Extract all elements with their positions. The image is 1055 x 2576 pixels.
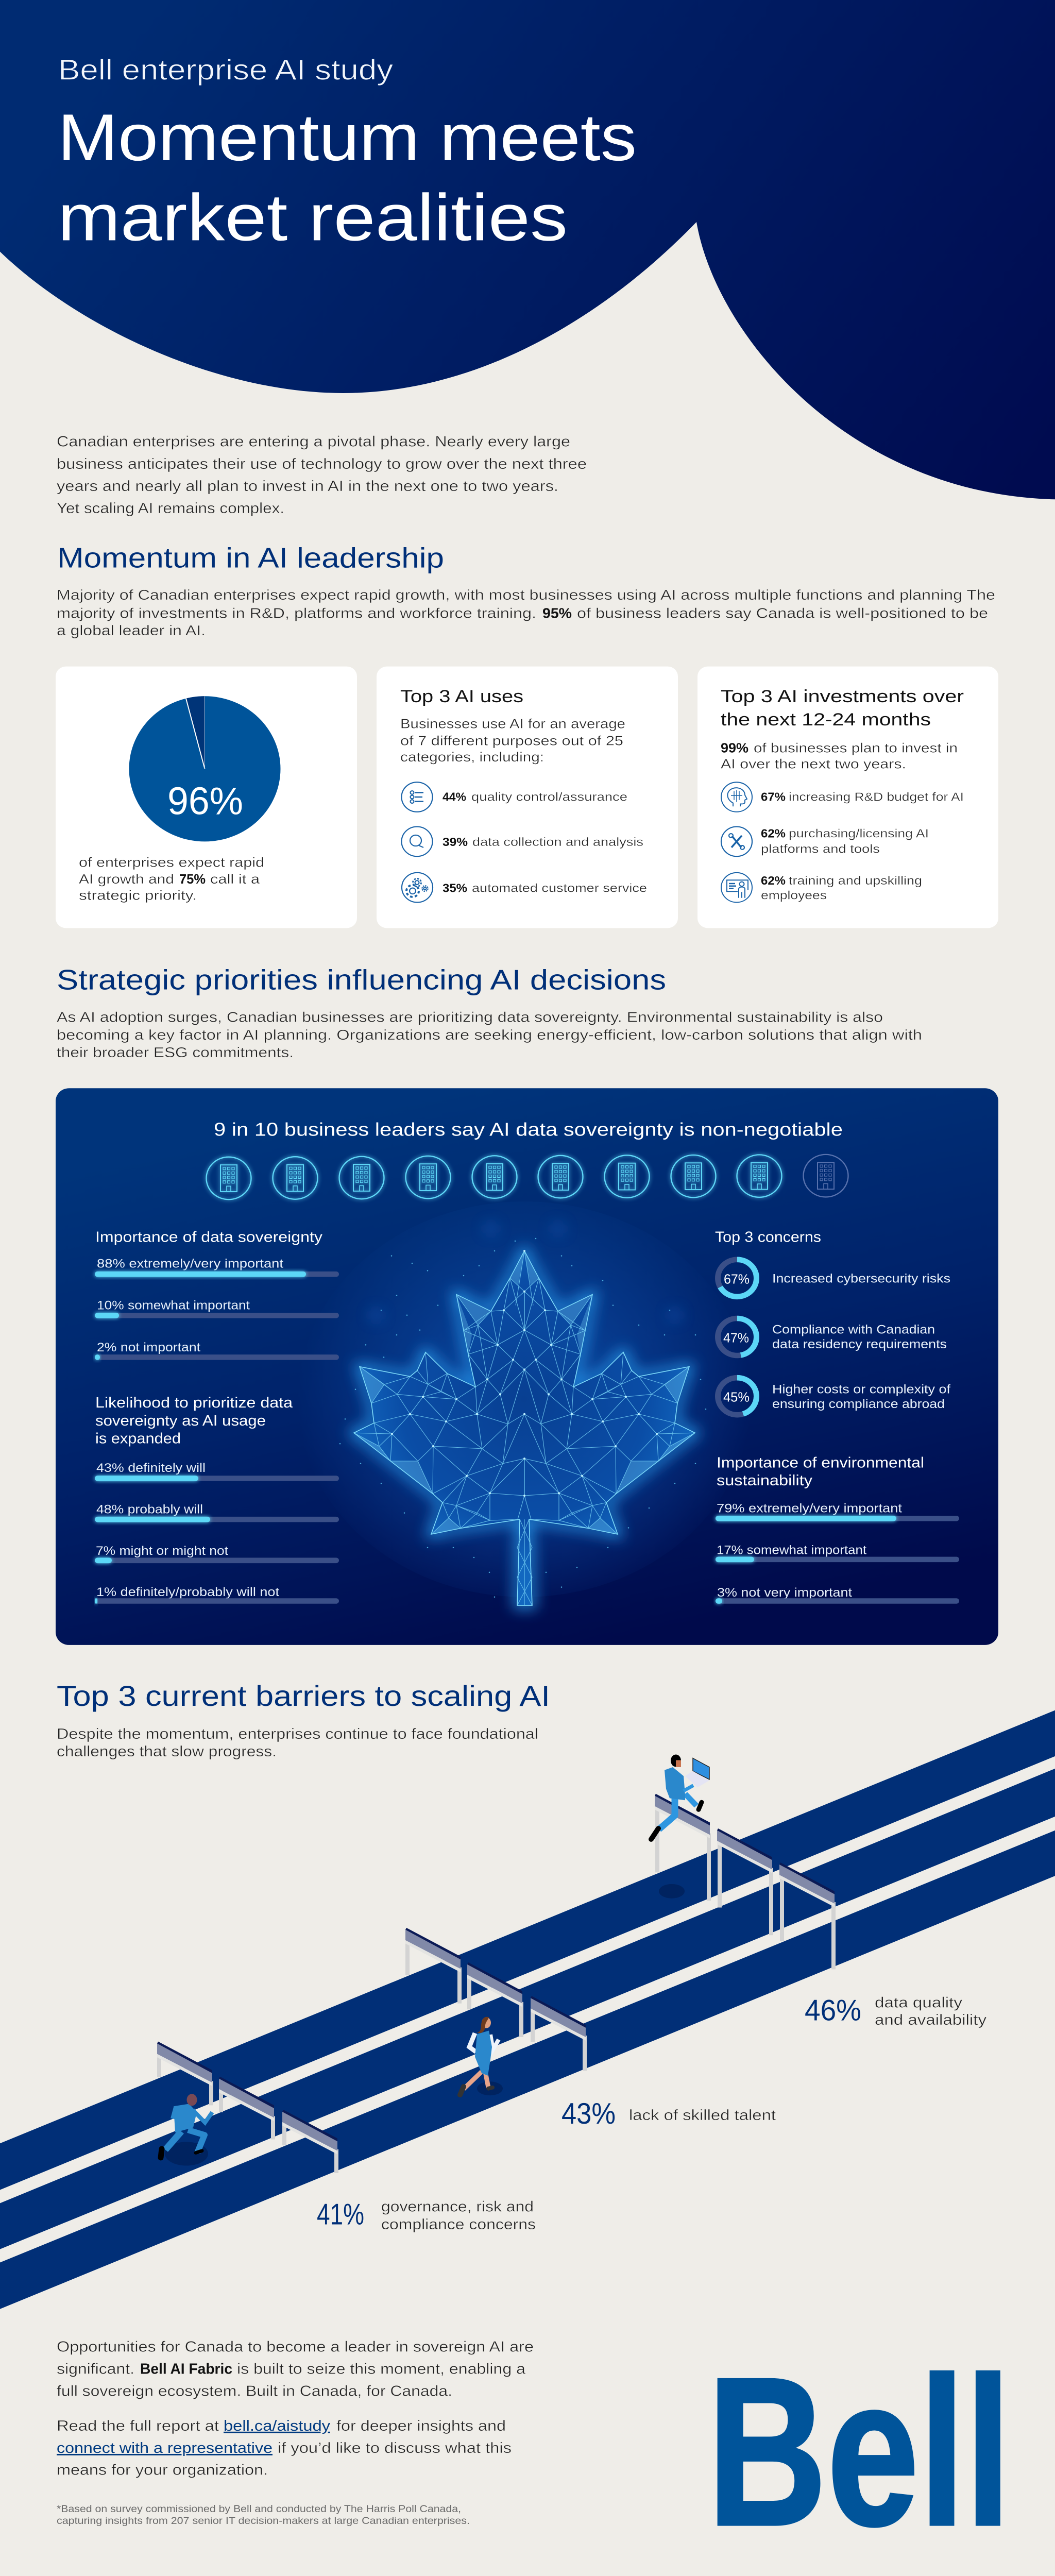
chart: likelihood to prioritize bbox=[95, 1395, 339, 1604]
bar: 17% bbox=[716, 1544, 959, 1562]
glow behind leaf bbox=[326, 1212, 726, 1596]
panel title: 9 in 10 business leaders say AI data sovereignty is non-negotiable bbox=[214, 1118, 843, 1140]
stat: 46% data quality: 46% bbox=[805, 1994, 861, 2027]
leadership paragraph: Majority of Canadian enterprises expect rapid growth, with most businesses using AI across multiple functions and planning The bbox=[57, 587, 995, 603]
item: quality control: 44% bbox=[443, 790, 466, 804]
chart heading: is expanded bbox=[95, 1430, 181, 1447]
call to action paragraph bbox=[57, 2417, 512, 2478]
card heading: the next 12-24 months bbox=[721, 710, 931, 730]
leadership paragraph: of business leaders say Canada is well-positioned to be bbox=[577, 605, 988, 621]
intro paragraph bbox=[57, 433, 587, 517]
illustration: running tracks bbox=[0, 1710, 1055, 2309]
bar: 1% bbox=[95, 1585, 339, 1604]
bar: 17%: 17% somewhat important bbox=[717, 1544, 866, 1557]
hurdles: group B bbox=[405, 1928, 587, 2071]
strategic paragraph: becoming a key factor in AI planning. Organizations are seeking energy-efficient, low-carbon solutions that align with bbox=[57, 1027, 922, 1043]
card description: of businesses plan to invest in bbox=[754, 740, 958, 756]
bar: 7%: 7% might or might not bbox=[96, 1545, 228, 1558]
card heading bbox=[721, 686, 964, 730]
panel: data sovereignty bbox=[56, 1088, 998, 1645]
icon: tools bbox=[721, 827, 752, 856]
donut: 45%: 45% bbox=[723, 1389, 750, 1405]
sparkle particles bbox=[340, 1239, 706, 1597]
closing paragraph: full sovereign ecosystem. Built in Canada, for Canada. bbox=[57, 2383, 452, 2400]
pie caption: strategic priority. bbox=[79, 888, 197, 903]
bar: 3%: 3% not very important bbox=[717, 1586, 852, 1600]
figure: woman runner bbox=[460, 2017, 499, 2095]
bar: 10% bbox=[95, 1299, 339, 1318]
panel: top 3 AI uses bbox=[377, 667, 678, 928]
item: data collection: 39% bbox=[443, 835, 468, 849]
barriers paragraph: Despite the momentum, enterprises continue to face foundational bbox=[57, 1726, 538, 1742]
bar: 48% bbox=[95, 1503, 339, 1522]
stat: 41% governance: 41% bbox=[317, 2198, 364, 2231]
intro paragraph: years and nearly all plan to invest in AI in the next one to two years. bbox=[57, 478, 558, 495]
call to action paragraph: means for your organization. bbox=[57, 2462, 268, 2478]
stat: 41% governance: governance, risk and bbox=[381, 2198, 534, 2215]
card heading: Top 3 AI uses bbox=[400, 686, 523, 706]
heading: strategic priorities: Strategic priorities influencing AI decisions bbox=[57, 963, 666, 995]
closing paragraph: is built to seize this moment, enabling a bbox=[237, 2361, 526, 2377]
call to action paragraph: Read the full report at bbox=[57, 2417, 219, 2434]
runner shadows bbox=[165, 1884, 685, 2165]
heading: momentum in AI leadership: Momentum in AI leadership bbox=[57, 542, 444, 573]
pie value: 96% bbox=[167, 780, 243, 823]
card description bbox=[400, 716, 625, 765]
concern: cybersecurity: Increased cybersecurity risks bbox=[772, 1272, 950, 1285]
figure: man runner bbox=[161, 2094, 212, 2158]
item: R&D budget: 67% bbox=[761, 790, 786, 804]
strategic paragraph: their broader ESG commitments. bbox=[57, 1044, 294, 1060]
bar: 10%: 10% somewhat important bbox=[97, 1299, 250, 1312]
stat: 46% data quality bbox=[805, 1994, 986, 2028]
main title: market realities bbox=[58, 180, 568, 255]
barriers paragraph: challenges that slow progress. bbox=[57, 1743, 277, 1760]
pie caption: call it a bbox=[210, 871, 260, 887]
call to action paragraph: for deeper insights and bbox=[336, 2417, 506, 2434]
pie caption bbox=[79, 855, 264, 903]
stat: 43% skilled talent: 43% bbox=[561, 2097, 616, 2130]
chart: importance of data sovereignty bbox=[95, 1229, 339, 1360]
card description: of 7 different purposes out of 25 bbox=[400, 733, 623, 748]
pie caption: of enterprises expect rapid bbox=[79, 855, 264, 870]
item: R&D budget: increasing R&D budget for AI bbox=[789, 790, 964, 804]
concern: costs: ensuring compliance abroad bbox=[772, 1398, 945, 1411]
chart heading: Likelihood to prioritize data bbox=[95, 1395, 293, 1411]
stat: 41% governance bbox=[317, 2198, 536, 2233]
footnote: capturing insights from 207 senior IT decision-makers at large Canadian enterprises. bbox=[57, 2516, 470, 2527]
bar: 1%: 1% definitely/probably will not bbox=[96, 1585, 279, 1599]
card description: AI over the next two years. bbox=[721, 756, 906, 771]
item: platforms and tools: 62% bbox=[761, 827, 786, 840]
concern: residency: Compliance with Canadian bbox=[772, 1323, 935, 1336]
stat: 41% governance: compliance concerns bbox=[381, 2216, 536, 2233]
barriers paragraph bbox=[57, 1726, 538, 1760]
chart: environmental sustainability bbox=[716, 1454, 959, 1604]
intro paragraph: Yet scaling AI remains complex. bbox=[57, 500, 284, 517]
icon: magnifier bbox=[402, 827, 433, 856]
icon: presenter training bbox=[721, 873, 752, 902]
item: platforms and tools bbox=[761, 827, 929, 855]
stat: 43% skilled talent: lack of skilled talent bbox=[629, 2107, 776, 2124]
call to action paragraph: connect with a representative bbox=[57, 2440, 273, 2456]
concerns heading: Top 3 concerns bbox=[715, 1229, 821, 1246]
icon: gears bbox=[402, 873, 433, 902]
closing paragraph: Opportunities for Canada to become a leader in sovereign AI are bbox=[57, 2338, 534, 2355]
hurdles: group A bbox=[655, 1794, 836, 1969]
illustration: maple leaf bbox=[354, 1251, 695, 1605]
panel: top 3 AI investments bbox=[697, 667, 998, 928]
call to action paragraph: if you’d like to discuss what this bbox=[278, 2440, 512, 2456]
bar: 7% bbox=[95, 1545, 339, 1563]
main title: Momentum meets bbox=[58, 100, 637, 174]
item: customer service: 35% bbox=[443, 882, 467, 894]
closing paragraph: significant. bbox=[57, 2361, 134, 2377]
card description: Businesses use AI for an average bbox=[400, 716, 625, 732]
donut: 67% bbox=[718, 1260, 756, 1297]
bar: 2% bbox=[95, 1341, 339, 1360]
strategic paragraph bbox=[57, 1009, 922, 1060]
header wave shape bbox=[0, 0, 1055, 499]
item: training: training and upskilling bbox=[789, 874, 922, 887]
footnote: *Based on survey commissioned by Bell and conducted by The Harris Poll Canada, bbox=[57, 2504, 461, 2515]
donut: 47% bbox=[718, 1318, 756, 1355]
item: training: employees bbox=[761, 889, 827, 902]
donut: 45% bbox=[718, 1378, 756, 1415]
item: training: 62% bbox=[761, 874, 786, 887]
panel: 96% pie card bbox=[56, 667, 357, 928]
bar: 43%: 43% definitely will bbox=[96, 1461, 206, 1475]
main title bbox=[58, 100, 637, 255]
bar: 79% bbox=[716, 1502, 959, 1521]
pie caption: 75% bbox=[179, 871, 206, 887]
bar: 79%: 79% extremely/very important bbox=[717, 1502, 902, 1516]
intro paragraph: business anticipates their use of technology to grow over the next three bbox=[57, 455, 587, 472]
donut: 67%: 67% bbox=[724, 1272, 750, 1286]
icon row: 9 of 10 buildings bbox=[206, 1155, 848, 1199]
item: platforms and tools: purchasing/licensing AI bbox=[789, 827, 929, 840]
card description: categories, including: bbox=[400, 749, 544, 765]
bar: 88%: 88% extremely/very important bbox=[97, 1257, 283, 1271]
chart heading bbox=[717, 1454, 924, 1489]
leadership paragraph: a global leader in AI. bbox=[57, 623, 206, 638]
stat: 46% data quality: data quality bbox=[875, 1994, 962, 2011]
bar: 48%: 48% probably will bbox=[96, 1503, 203, 1516]
closing paragraph: Bell AI Fabric bbox=[140, 2361, 232, 2377]
icon: checklist bbox=[402, 782, 433, 812]
footnote bbox=[57, 2504, 470, 2527]
stat: 46% data quality: and availability bbox=[875, 2011, 986, 2028]
leadership paragraph: 95% bbox=[542, 605, 572, 621]
pie caption: AI growth and bbox=[79, 871, 174, 887]
top 3 concerns bbox=[715, 1229, 950, 1415]
bar: 2%: 2% not important bbox=[97, 1341, 200, 1354]
eyebrow title: Bell enterprise AI study bbox=[58, 55, 394, 86]
concern: costs: Higher costs or complexity of bbox=[772, 1383, 950, 1396]
figure: runner with laptop bbox=[651, 1754, 709, 1839]
bar: 88% bbox=[95, 1257, 339, 1277]
item: quality control: quality control/assurance bbox=[471, 790, 627, 804]
heading: barriers: Top 3 current barriers to scaling AI bbox=[57, 1681, 550, 1713]
card description: 99% bbox=[721, 740, 748, 756]
item: data collection: data collection and analysis bbox=[472, 835, 643, 849]
item: platforms and tools: platforms and tools bbox=[761, 842, 880, 855]
chart heading: Importance of data sovereignty bbox=[95, 1229, 322, 1246]
item: customer service: automated customer service bbox=[472, 882, 647, 894]
strategic paragraph: As AI adoption surges, Canadian businesses are prioritizing data sovereignty. Environmental sustainability is also bbox=[57, 1009, 883, 1025]
chart heading: sovereignty as AI usage bbox=[95, 1412, 266, 1429]
stat: 43% skilled talent bbox=[561, 2097, 776, 2130]
leadership paragraph: majority of investments in R&D, platforms and workforce training. bbox=[57, 605, 536, 621]
call to action paragraph: bell.ca/aistudy bbox=[224, 2417, 330, 2434]
bar: 43% bbox=[95, 1461, 339, 1481]
item: training bbox=[761, 874, 922, 902]
chart heading bbox=[95, 1395, 293, 1447]
intro paragraph: Canadian enterprises are entering a pivotal phase. Nearly every large bbox=[57, 433, 570, 450]
closing paragraph bbox=[57, 2338, 534, 2400]
chart heading: Importance of environmental bbox=[717, 1454, 924, 1471]
concern: residency bbox=[772, 1323, 947, 1351]
hurdles: group C bbox=[157, 2042, 338, 2173]
icon: AI brain head bbox=[721, 782, 752, 812]
concern: residency: data residency requirements bbox=[772, 1338, 947, 1351]
bar: 3% bbox=[716, 1586, 959, 1604]
chart heading: sustainability bbox=[717, 1472, 812, 1489]
concern: costs bbox=[772, 1383, 950, 1411]
card heading: Top 3 AI investments over bbox=[721, 686, 964, 706]
soft bokeh lights bbox=[370, 1223, 681, 1321]
pie chart bbox=[129, 696, 280, 841]
donut: 47%: 47% bbox=[723, 1330, 749, 1345]
card description bbox=[721, 740, 958, 771]
leadership paragraph bbox=[57, 587, 995, 638]
